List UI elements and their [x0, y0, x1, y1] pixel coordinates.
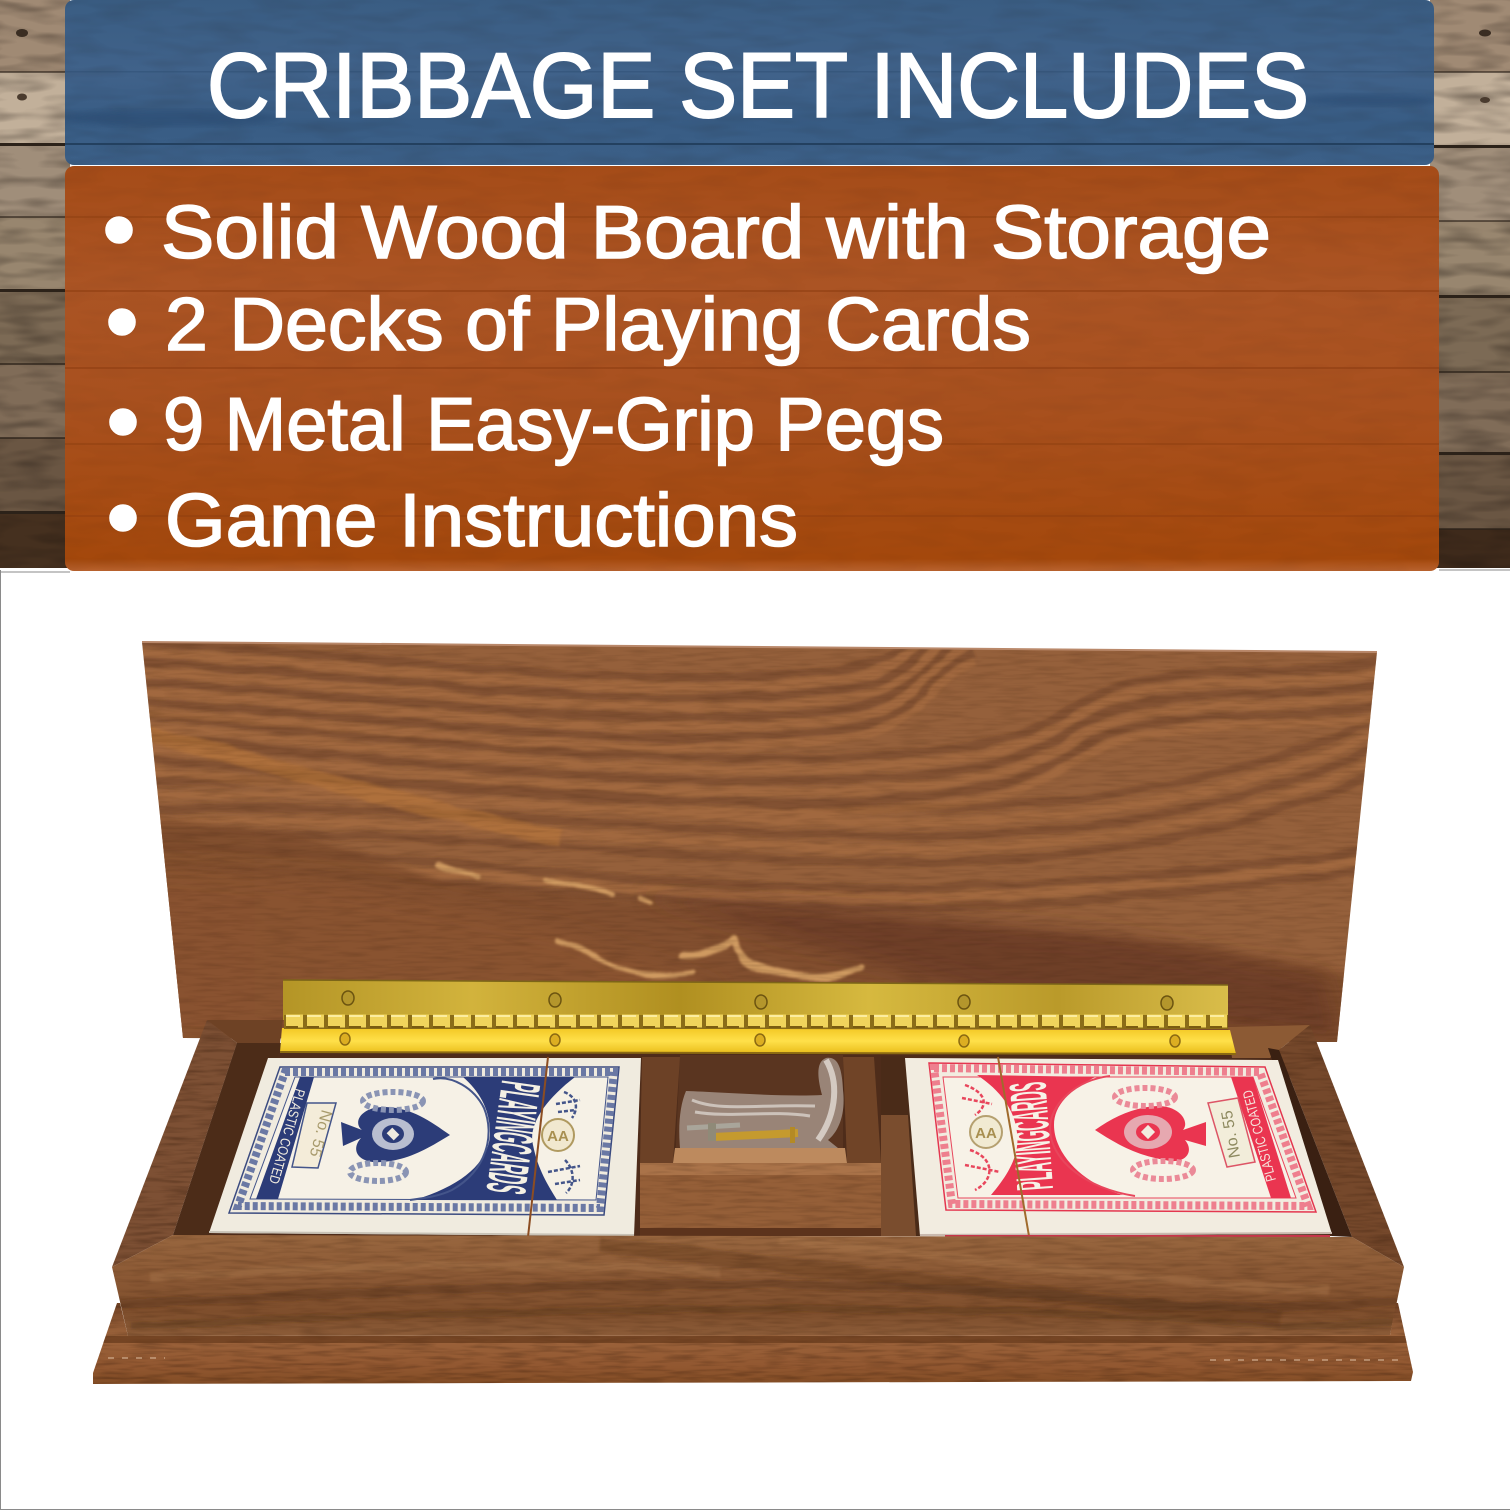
center tray with pegs: [640, 1055, 920, 1236]
list item: playing cards: 2 Decks of Playing Cards: [165, 282, 1031, 366]
dark lower wedge: [160, 817, 1344, 1042]
AA seal: [970, 1116, 1002, 1148]
lid top highlight edge: [142, 642, 1377, 652]
AA seal: [542, 1119, 574, 1151]
list item: game instructions: Game Instructions: [165, 478, 798, 562]
panel: blue title banner: [60, 0, 1440, 165]
floral scroll ornaments: [548, 1092, 580, 1193]
cribbage board photo: [90, 592, 1415, 1390]
card pack body: [905, 1058, 1332, 1236]
number label: No. 55: [306, 1108, 335, 1159]
open wooden lid: [142, 643, 1377, 1042]
card border pattern: [229, 1067, 619, 1215]
left inner wall: [173, 1043, 282, 1235]
blue card deck: [209, 1057, 641, 1237]
panel: rustic wood plank background: [0, 0, 1510, 568]
back rim left: [207, 1020, 283, 1043]
metal pegs: [687, 1125, 740, 1128]
photo frame line: [0, 570, 1510, 1510]
spade emblem: [341, 1092, 450, 1181]
binding strap: [528, 1057, 548, 1237]
right floor compartment: [881, 1056, 920, 1236]
playing cards navy arch: [414, 1077, 575, 1200]
list item: solid wood board: Solid Wood Board with Storage: [161, 190, 1271, 274]
floral scroll ornaments: [962, 1085, 1000, 1190]
step block: [673, 1148, 847, 1163]
front block: [640, 1163, 881, 1228]
screws: [342, 991, 1173, 1010]
card pack body: [209, 1058, 641, 1236]
box front wall: [100, 1230, 1410, 1340]
left divider: [640, 1057, 680, 1163]
cribbage board photo: PLAYINGCARDS: [1000, 1080, 1065, 1192]
box base molding: [93, 1303, 1413, 1384]
number plate: [292, 1103, 336, 1168]
upper leaf: [283, 980, 1228, 1020]
right red band: [1231, 1077, 1291, 1198]
brass piano hinge: [280, 980, 1236, 1054]
plastic peg bag: [679, 1058, 844, 1148]
panel: orange list of set contents: [65, 166, 1439, 571]
plastic coated label: PLASTIC COATED: [266, 1087, 308, 1186]
pale figure streaks: [437, 865, 860, 977]
spade emblem: [1095, 1088, 1206, 1179]
back rim right: [1228, 1025, 1310, 1058]
right divider: [843, 1057, 881, 1163]
list item: metal pegs: 9 Metal Easy-Grip Pegs: [163, 382, 944, 466]
hinge knuckles: [284, 1015, 1228, 1029]
right rim: [1279, 1025, 1404, 1267]
card border pattern: [929, 1063, 1316, 1212]
back wall: [675, 1055, 843, 1165]
box interior floor: [173, 1040, 1335, 1236]
right inner wall: [1268, 1048, 1352, 1237]
AA seal: AA: [547, 1128, 569, 1145]
binding strap: [998, 1057, 1029, 1236]
lower leaf: [280, 1028, 1236, 1054]
grain contours: [142, 643, 1377, 912]
plastic coated label: PLASTIC COATED: [1239, 1088, 1279, 1183]
red card deck: [905, 1057, 1332, 1237]
playing cards red arch: [977, 1075, 1123, 1195]
AA seal: AA: [975, 1125, 997, 1142]
number plate: [1208, 1098, 1255, 1167]
number label: No. 55: [1219, 1109, 1244, 1159]
left rim: [112, 1020, 237, 1267]
left navy band: [256, 1077, 314, 1199]
title: CRIBBAGE SET INCLUDES: [207, 35, 1309, 137]
